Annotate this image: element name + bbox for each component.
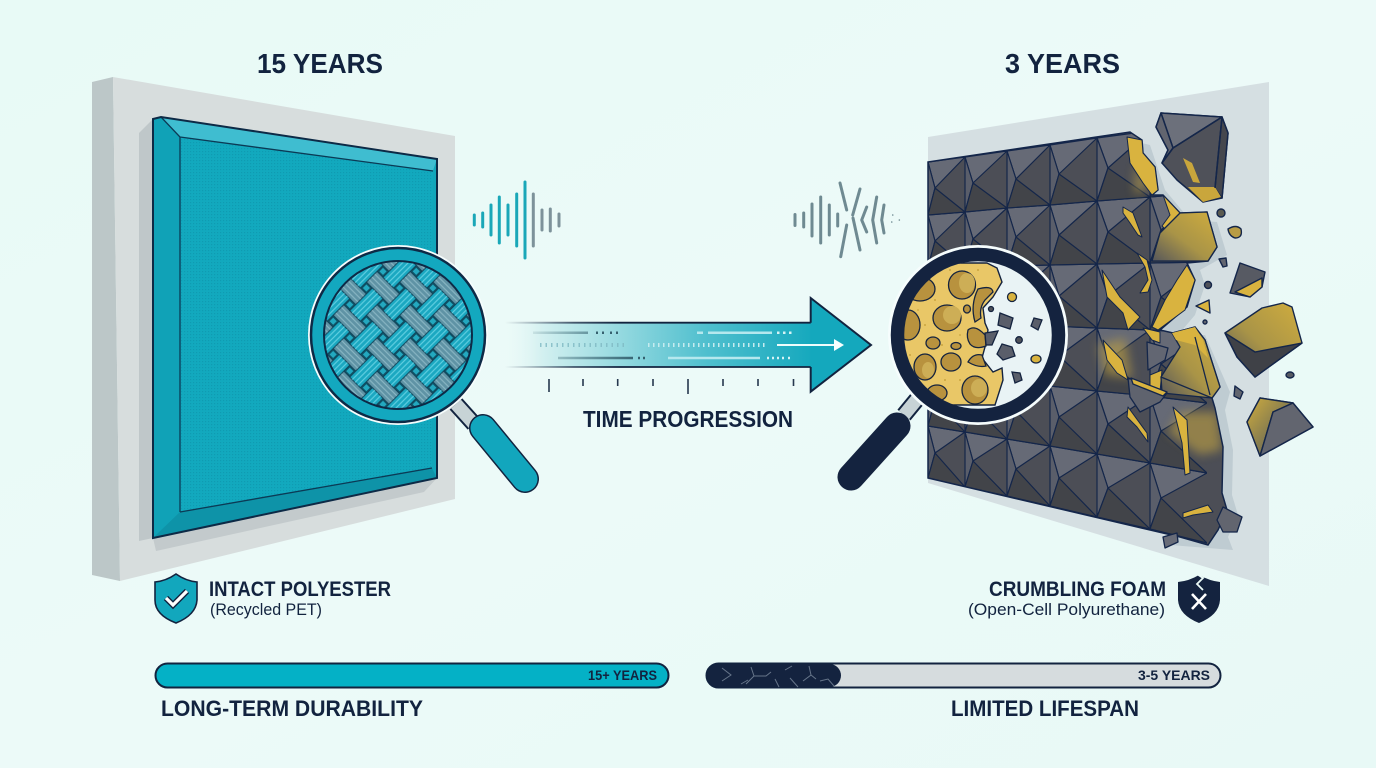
flying chunk: large top — [1156, 113, 1228, 202]
icon: cracked shield with x — [1178, 574, 1220, 623]
foam grid — [928, 132, 1226, 544]
arrow: time progression — [505, 298, 871, 392]
wall — [92, 77, 455, 581]
label: open-cell polyurethane: (Open-Cell Polyurethane) — [968, 600, 1165, 619]
label: time progression: TIME PROGRESSION — [583, 406, 793, 432]
handle — [456, 404, 525, 479]
label: crumbling foam: CRUMBLING FOAM — [989, 578, 1166, 601]
wall — [928, 82, 1269, 586]
debris chunks — [1196, 209, 1313, 456]
acoustic panel — [153, 117, 437, 538]
label: recycled PET: (Recycled PET) — [210, 600, 322, 619]
magnifier: polyester weave — [308, 245, 525, 479]
panel: intact polyester on wall — [92, 77, 455, 581]
bar value: 15+ YEARS — [588, 667, 657, 683]
foam shadow — [1130, 140, 1238, 550]
label: limited lifespan: LIMITED LIFESPAN — [951, 696, 1139, 721]
broken foam pieces on panel — [1128, 212, 1242, 548]
bar value: 3-5 YEARS — [1138, 667, 1210, 683]
lens — [888, 245, 1068, 425]
bar: limited lifespan — [706, 664, 1220, 688]
panel: crumbling foam on wall — [920, 82, 1313, 586]
foam outline — [928, 132, 1227, 545]
heading: 3 years: 3 YEARS — [1005, 48, 1120, 79]
label: long-term durability: LONG-TERM DURABILITY — [161, 696, 423, 721]
timeline ticks — [549, 379, 794, 394]
handle — [851, 398, 918, 477]
gold exposed cracks — [1102, 137, 1213, 518]
label: intact polyester: INTACT POLYESTER — [209, 578, 391, 601]
lens — [308, 245, 488, 425]
icon: broken sound wave — [795, 183, 899, 257]
bar: long-term durability — [156, 664, 668, 688]
gold dust haze — [1098, 165, 1222, 455]
magnifier: crumbling foam — [851, 245, 1068, 477]
heading: 15 years: 15 YEARS — [257, 48, 383, 79]
icon: shield with check — [155, 574, 197, 623]
icon: healthy sound wave — [474, 182, 559, 258]
